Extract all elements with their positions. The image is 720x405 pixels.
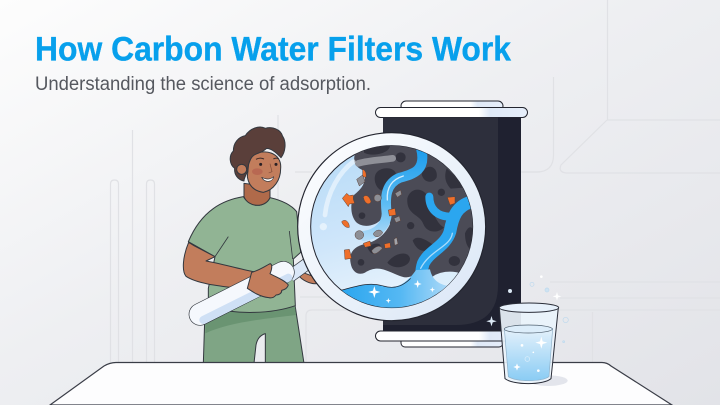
glass shadow — [529, 375, 568, 386]
lens interior — [311, 146, 473, 308]
shirt — [188, 197, 301, 312]
glass rim — [499, 303, 559, 312]
subtitle: Understanding the science of adsorption. — [35, 74, 371, 95]
magnifying glass — [298, 133, 486, 321]
upper water channel — [364, 148, 422, 236]
glass body — [499, 308, 558, 384]
water in glass — [504, 329, 553, 381]
sparkles in water — [368, 280, 435, 303]
filter body — [383, 118, 521, 332]
carbon pores — [358, 146, 474, 267]
table — [50, 362, 672, 405]
filter bottom cap — [376, 331, 528, 347]
smile — [262, 177, 274, 181]
ear — [237, 164, 247, 174]
carbon highlight — [358, 158, 393, 163]
nose — [269, 164, 272, 173]
title: How Carbon Water Filters Work — [35, 30, 512, 68]
cartridge neck — [290, 264, 307, 276]
eyes and brows — [256, 158, 279, 166]
sleeve fold — [215, 231, 293, 259]
trousers — [203, 305, 304, 363]
neck — [244, 183, 270, 205]
background wall line pattern — [110, 0, 720, 362]
cheek — [252, 168, 263, 175]
lens highlight dot — [320, 223, 327, 230]
face — [247, 152, 281, 192]
floating bubbles — [530, 282, 568, 343]
arm behind lens — [298, 272, 318, 284]
water surface — [504, 325, 552, 333]
contaminant particles — [342, 169, 455, 259]
hair — [230, 127, 285, 181]
lens contents — [340, 142, 477, 313]
lens ring — [298, 133, 486, 321]
hand — [247, 264, 288, 298]
glass of water — [499, 275, 568, 386]
water pool — [341, 269, 448, 308]
glass sparkles — [513, 275, 561, 372]
person — [183, 127, 318, 363]
lower light water pocket — [432, 272, 458, 291]
filter top cap — [376, 101, 528, 118]
filter cartridge — [376, 101, 528, 347]
lower water channel — [387, 176, 472, 282]
handheld cartridge — [200, 272, 288, 320]
left arm — [183, 242, 270, 291]
filter sparkles — [486, 289, 512, 326]
activated carbon — [350, 142, 477, 277]
lens highlight — [325, 162, 353, 215]
water surface line — [340, 278, 411, 291]
